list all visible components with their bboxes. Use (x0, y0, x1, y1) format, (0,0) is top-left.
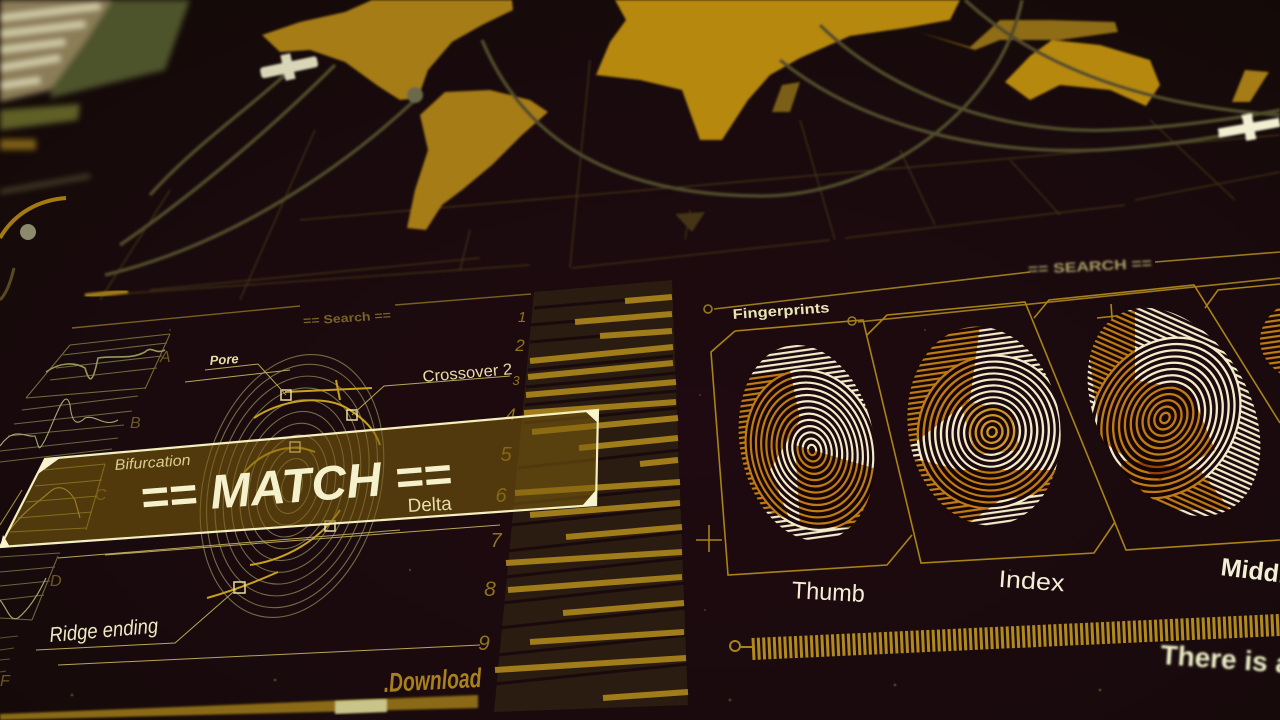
continent: Asia fragments (918, 20, 1118, 50)
row numbers: 7 (490, 530, 502, 552)
gold bars (495, 297, 688, 698)
continent: North America (262, 0, 513, 100)
grid lines (90, 60, 1280, 300)
chart A (26, 334, 170, 398)
chart C (0, 464, 105, 532)
continent: Africa and Eurasia (596, 0, 960, 140)
node: small ring on map (407, 87, 423, 103)
row numbers: 5 (500, 444, 512, 466)
minutiae markers (234, 390, 357, 593)
panel: green strip (50, 0, 190, 98)
bottom progress bar (0, 695, 478, 720)
bar column (494, 280, 688, 712)
label: Fingerprints: Fingerprints (732, 299, 830, 322)
row numbers: 2 (514, 336, 525, 355)
label: Crossover 2: Crossover 2 (422, 361, 513, 386)
bar: dim band (0, 176, 90, 192)
label: Download: .Download (383, 663, 483, 698)
marker: map pin (675, 212, 705, 232)
label: Delta: Delta (407, 494, 453, 517)
label: Index: Index (998, 566, 1065, 597)
bar: olive band (0, 104, 80, 130)
island: New Zealand (1232, 70, 1269, 102)
corner marks (0, 410, 598, 548)
search rule: left panel (72, 291, 531, 328)
tick bar (730, 625, 1280, 651)
leader lines (36, 364, 510, 665)
label: Thumb: Thumb (791, 577, 866, 608)
bar: gold tick (0, 139, 36, 150)
gauge: left ring (0, 198, 66, 300)
heading: SEARCH: == SEARCH == (1028, 255, 1152, 277)
header rules (704, 252, 1280, 325)
MATCH banner (0, 410, 598, 548)
axis letters: F (0, 673, 11, 690)
chart D (0, 553, 60, 620)
left fingerprint (172, 334, 412, 638)
axis letters: A (159, 349, 171, 366)
label: Ridge ending: Ridge ending (48, 615, 159, 647)
chart B (0, 396, 138, 462)
marker: right node (1218, 114, 1280, 141)
continent: South America (407, 90, 548, 230)
specks (70, 329, 1102, 702)
world map (90, 0, 1280, 300)
row numbers: 4 (506, 405, 516, 424)
row numbers (478, 309, 526, 655)
frames (696, 284, 1280, 575)
column backdrop (494, 280, 688, 712)
continent: Australia (1005, 40, 1160, 106)
next print sliver (1260, 306, 1280, 374)
label: Bifurcation: Bifurcation (114, 452, 191, 474)
route arcs (105, 0, 1280, 275)
marker: left node (260, 53, 319, 81)
row numbers: 6 (495, 485, 507, 507)
axis letters (0, 349, 171, 690)
island: Madagascar (772, 82, 800, 112)
chart F (0, 636, 18, 672)
heading: MATCH: == MATCH == (138, 448, 453, 525)
axis letters: C (95, 487, 107, 504)
fingerprint rings (172, 334, 412, 638)
heading: Search: == Search == (303, 308, 391, 328)
row numbers: 1 (518, 309, 526, 326)
thumb print (738, 345, 875, 541)
panel: pale readout (0, 0, 112, 102)
index print (907, 326, 1061, 526)
label: Pore: Pore (209, 351, 239, 368)
axis letters: B (130, 415, 141, 432)
middle print (1088, 308, 1260, 516)
row numbers: 3 (512, 373, 520, 388)
ridge highlights (207, 380, 380, 598)
axis letters: D (50, 573, 62, 590)
row numbers: 9 (478, 632, 490, 655)
fingerprints panel (696, 252, 1280, 685)
banner plate (0, 410, 598, 547)
row numbers: 8 (484, 578, 496, 601)
row separators (494, 296, 688, 684)
progress glow (335, 699, 387, 714)
top-left blurred panel (0, 0, 190, 192)
